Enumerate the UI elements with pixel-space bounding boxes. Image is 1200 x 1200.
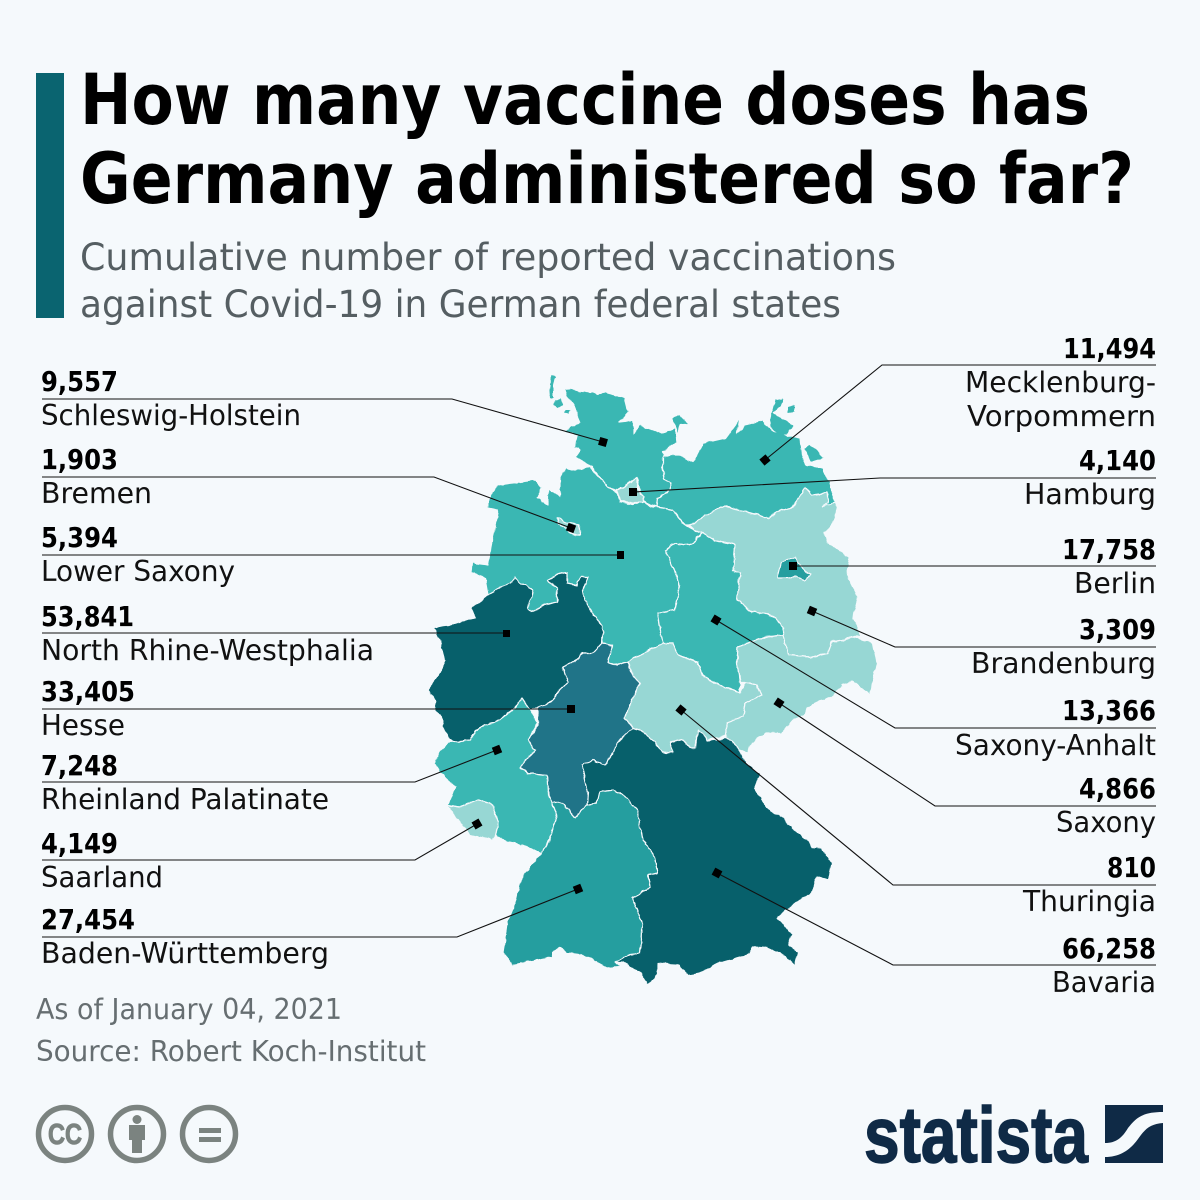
label: Mecklenburg-Vorpommern	[965, 332, 1156, 433]
subtitle: against Covid-19 in German federal states	[80, 283, 841, 326]
label: Schleswig-Holstein: Schleswig-Holstein	[41, 399, 301, 432]
state: Hamburg	[617, 478, 644, 503]
label: Hesse: Hesse	[41, 709, 125, 742]
label: North Rhine-Westphalia: North Rhine-Westphalia	[41, 634, 374, 667]
icon: creative commons	[38, 1108, 92, 1160]
label: Saxony: 4,866	[1079, 772, 1156, 805]
label: Berlin	[1062, 533, 1156, 600]
label: Bremen	[41, 443, 152, 510]
label: North Rhine-Westphalia	[41, 600, 374, 667]
label: Thuringia	[1022, 851, 1156, 918]
label: Mecklenburg-Vorpommern: Mecklenburg-	[965, 366, 1156, 399]
state: Schleswig-Holstein	[549, 375, 687, 507]
label: North Rhine-Westphalia: 53,841	[41, 600, 134, 633]
label: Saxony-Anhalt: 13,366	[1062, 694, 1156, 727]
title: How many vaccine doses has	[80, 59, 1090, 141]
label: Mecklenburg-Vorpommern: 11,494	[1063, 332, 1156, 365]
callout line: Berlin	[789, 562, 1156, 570]
state: Bavaria	[582, 728, 832, 985]
callout line: Hamburg	[629, 478, 1156, 496]
label: Baden-Württemberg	[41, 903, 329, 970]
state: Saxony	[727, 635, 877, 752]
icon: attribution person	[110, 1108, 164, 1160]
state: Hesse	[520, 643, 640, 818]
state: Saarland	[447, 800, 498, 840]
footer: date and source: As of January 04, 2021	[36, 993, 342, 1026]
label: Baden-Württemberg: Baden-Württemberg	[41, 937, 329, 970]
label: Rheinland Palatinate: Rheinland Palatinate	[41, 783, 329, 816]
label: Saarland: 4,149	[41, 827, 118, 860]
label: Thuringia: 810	[1107, 851, 1156, 884]
label: Schleswig-Holstein: 9,557	[41, 365, 118, 398]
state: Brandenburg	[690, 487, 862, 657]
state: Saxony-Anhalt	[657, 533, 783, 693]
label: Bremen: 1,903	[41, 443, 118, 476]
map of Germany	[428, 375, 877, 985]
state: Mecklenburg-Vorpommern	[657, 398, 835, 525]
callout line: Thuringia	[675, 704, 1156, 885]
label: Bavaria: 66,258	[1062, 932, 1156, 965]
label: Hamburg	[1024, 444, 1156, 511]
label: Lower Saxony	[41, 521, 235, 588]
callout line: North Rhine-Westphalia	[42, 630, 510, 637]
statista wordmark: statista	[864, 1090, 1089, 1179]
label: Saxony-Anhalt: Saxony-Anhalt	[955, 729, 1156, 762]
accent bar	[36, 73, 64, 318]
label: Lower Saxony: 5,394	[41, 521, 118, 554]
label: Hamburg: 4,140	[1079, 444, 1156, 477]
label: Saxony: Saxony	[1056, 806, 1156, 839]
label: Bavaria: Bavaria	[1052, 966, 1156, 999]
label: Mecklenburg-Vorpommern: Vorpommern	[967, 400, 1156, 433]
callout line: Rhineland-Palatinate	[42, 745, 502, 782]
label: Bremen: Bremen	[41, 477, 152, 510]
state: North Rhine-Westphalia	[428, 573, 603, 742]
icon: no derivatives equals	[182, 1108, 236, 1160]
callout line: Mecklenburg-Vorpommern	[759, 365, 1156, 466]
state: Berlin	[778, 557, 810, 580]
label: Berlin: Berlin	[1074, 567, 1156, 600]
state: Baden-Wuerttemberg	[503, 790, 658, 968]
footer: date and source	[36, 993, 426, 1068]
callout line: Hesse	[42, 705, 575, 713]
statista logo mark	[1105, 1105, 1163, 1163]
label: Hesse	[41, 675, 135, 742]
label: Saarland: Saarland	[41, 861, 163, 894]
label: Thuringia: Thuringia	[1022, 885, 1156, 918]
state: Lower Saxony	[472, 467, 703, 665]
label: Brandenburg	[971, 613, 1156, 680]
callout line: Bavaria	[712, 868, 1156, 965]
label: Brandenburg: Brandenburg	[971, 647, 1156, 680]
callout line: Brandenburg	[807, 606, 1156, 647]
callout line: Bremen	[42, 477, 576, 533]
callout line: Saarland	[42, 819, 482, 860]
label: Bavaria	[1052, 932, 1156, 999]
label: Hamburg: Hamburg	[1024, 478, 1156, 511]
state: Thuringia	[625, 643, 762, 753]
label: Schleswig-Holstein	[41, 365, 301, 432]
label: Berlin: 17,758	[1062, 533, 1156, 566]
callout line: Saxony	[773, 697, 1156, 806]
subtitle: Cumulative number of reported vaccinations	[80, 236, 896, 279]
state: Bremen	[557, 518, 580, 536]
icon: creative commons: CC	[48, 1119, 82, 1151]
callout line: Schleswig-Holstein	[42, 399, 608, 447]
state: Rhineland-Palatinate	[435, 698, 557, 853]
callout line: Baden-Wuerttemberg	[42, 884, 583, 937]
footer: date and source: Source: Robert Koch-Institut	[36, 1035, 426, 1068]
label: Baden-Württemberg: 27,454	[41, 903, 135, 936]
label: Rheinland Palatinate	[41, 749, 329, 816]
subtitle	[80, 236, 896, 326]
title	[80, 59, 1134, 220]
label: Saxony	[1056, 772, 1156, 839]
label: Lower Saxony: Lower Saxony	[41, 555, 235, 588]
label: Saxony-Anhalt	[955, 694, 1156, 762]
label: Rheinland Palatinate: 7,248	[41, 749, 118, 782]
label: Hesse: 33,405	[41, 675, 135, 708]
callout line: Lower Saxony	[42, 551, 624, 559]
label: Saarland	[41, 827, 163, 894]
callout line: Saxony-Anhalt	[711, 615, 1156, 728]
label: Brandenburg: 3,309	[1079, 613, 1156, 646]
